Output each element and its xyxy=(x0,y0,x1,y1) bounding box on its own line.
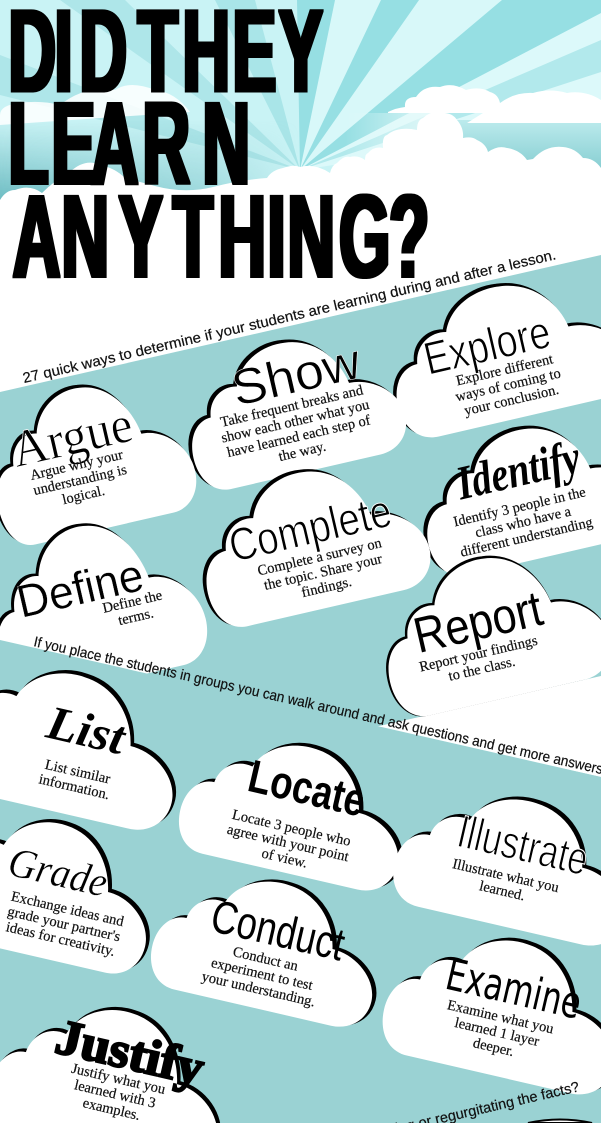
cloud shape xyxy=(0,645,198,837)
cloud shape xyxy=(169,317,413,496)
description: Identify 3 people in the xyxy=(452,484,587,530)
description: Argue why your xyxy=(29,447,125,484)
description: ways of coming to xyxy=(454,366,562,405)
cloud card: Illustrate xyxy=(386,772,601,953)
description: terms. xyxy=(117,605,155,629)
cloud shape xyxy=(183,445,437,634)
lower sky band right xyxy=(440,120,601,180)
cloud card: Grade xyxy=(0,796,171,981)
description: deeper. xyxy=(471,1035,515,1060)
cloud shape xyxy=(405,402,601,583)
description: your conclusion. xyxy=(463,382,560,419)
cloud shape xyxy=(172,719,423,898)
lower sky shading left xyxy=(0,126,276,200)
heading: Report: Report xyxy=(408,580,548,664)
description: Illustrate what you xyxy=(451,856,560,896)
cloud card: Show xyxy=(169,317,413,496)
description: Exchange ideas and xyxy=(9,889,126,930)
description: Conduct an xyxy=(231,944,300,975)
heading: Complete: Complete xyxy=(224,484,396,572)
description: experiment to test xyxy=(209,955,314,994)
cloud card: Identify xyxy=(405,402,601,583)
cloud card: Locate xyxy=(172,719,423,898)
section 2 teal band xyxy=(0,640,601,1123)
description: ideas for creativity. xyxy=(4,919,116,960)
heading: Show: Show xyxy=(226,333,367,417)
cloud shape xyxy=(0,501,215,706)
description: List similar xyxy=(43,757,112,787)
description: different understanding xyxy=(459,515,594,561)
title line 3: ANYTHING? xyxy=(13,171,429,303)
pale haze under upper cloud xyxy=(345,113,440,160)
title line 2: LEARN xyxy=(8,78,250,210)
description: show each other what you xyxy=(220,397,371,447)
description: the topic. Share your xyxy=(262,551,384,594)
heading: List: List xyxy=(41,696,132,765)
heading: Grade: Grade xyxy=(4,839,112,907)
description: agree with your point xyxy=(225,822,350,865)
soft cloud behind the title xyxy=(0,85,190,125)
sunburst rays xyxy=(0,0,601,170)
cloud shape xyxy=(366,533,601,723)
cloud card: Justify xyxy=(0,982,243,1123)
description: have learned each step of xyxy=(226,412,372,461)
partial cloud at bottom right xyxy=(528,1120,592,1123)
cloud card: Examine xyxy=(375,913,601,1102)
heading: Conduct: Conduct xyxy=(206,889,350,971)
cloud shape xyxy=(0,796,171,981)
cloud card: Argue xyxy=(0,363,203,551)
description: information. xyxy=(37,771,111,803)
description: class who have a xyxy=(474,504,573,541)
description: Explore different xyxy=(455,351,555,389)
cloud card: Report xyxy=(366,533,601,723)
description: the way. xyxy=(277,439,328,465)
cloud card: Complete xyxy=(183,445,437,634)
cloud shape xyxy=(0,982,243,1123)
description: Complete a survey on xyxy=(256,535,384,579)
description: Report your findings xyxy=(418,633,539,676)
upper cloud xyxy=(388,85,601,123)
cloud shape xyxy=(374,258,601,444)
cloud card: Explore xyxy=(374,258,601,444)
description: learned. xyxy=(478,878,526,904)
description: learned with 3 xyxy=(73,1077,157,1112)
description: findings. xyxy=(300,574,353,601)
cloud shape xyxy=(0,363,203,551)
heading: Justify: Justify xyxy=(51,1008,209,1096)
description: of view. xyxy=(260,846,309,872)
title: Did They Learn Anything? xyxy=(8,0,429,303)
white wedge under the Report cloud xyxy=(375,676,601,777)
description: to the class. xyxy=(447,654,517,685)
cloud card: Define xyxy=(0,501,215,706)
description: learned 1 layer xyxy=(453,1015,541,1050)
section 1 background edge: white band meeting teal xyxy=(0,255,601,800)
heading: Explore: Explore xyxy=(419,305,555,385)
cloud shape xyxy=(386,772,601,953)
intro sentence: 27 quick ways to determine if your students are learning during and after a lesson. xyxy=(21,247,558,387)
cloud shape xyxy=(144,855,397,1034)
large cloud bank xyxy=(0,112,601,420)
description: Define the xyxy=(101,588,164,617)
description: Examine what you xyxy=(446,997,555,1037)
heading: Argue: Argue xyxy=(6,396,138,479)
heading: Locate: Locate xyxy=(244,749,370,827)
description: Justify what you xyxy=(70,1061,167,1098)
cloud card: List xyxy=(0,645,198,837)
description: Take frequent breaks and xyxy=(219,382,365,431)
heading: Define: Define xyxy=(12,548,148,628)
description: understanding is xyxy=(32,462,129,499)
description: grade your partner's xyxy=(6,904,122,945)
cloud card: Conduct xyxy=(144,855,397,1034)
sky xyxy=(0,0,601,220)
cloud shape xyxy=(375,913,601,1102)
description: logical. xyxy=(61,483,106,508)
header: sky with sunburst and clouds xyxy=(0,0,601,420)
description: your understanding. xyxy=(200,969,317,1010)
description: Locate 3 people who xyxy=(231,807,352,850)
